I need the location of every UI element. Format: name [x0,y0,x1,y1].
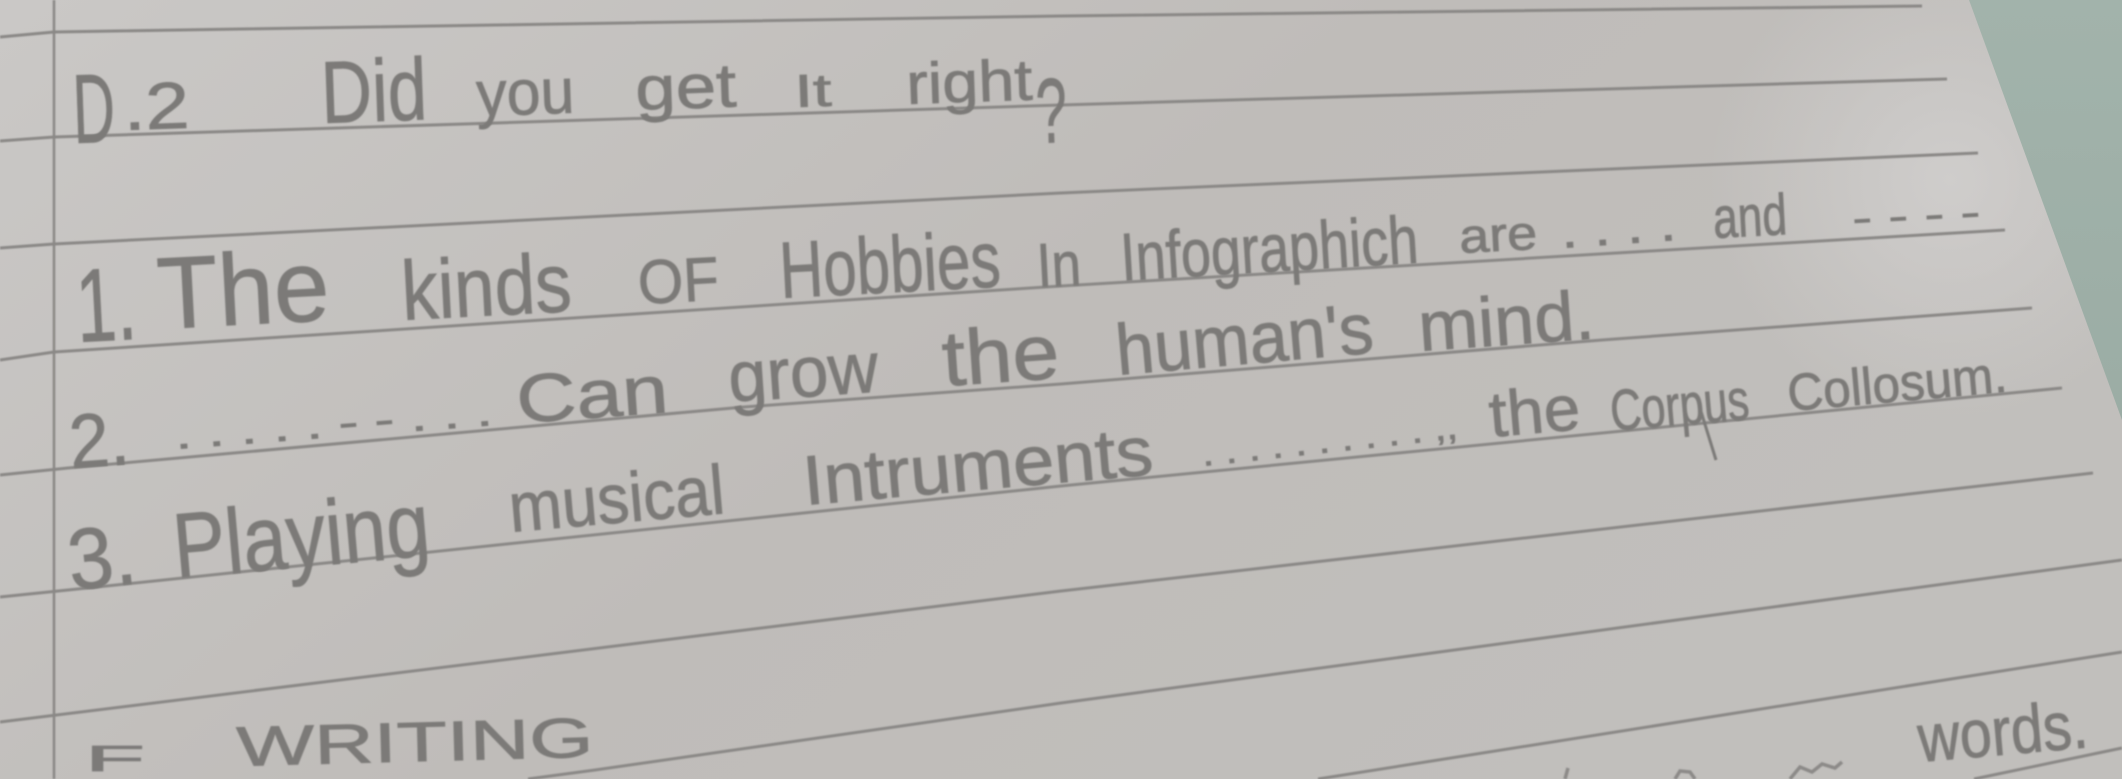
question 3: Intruments [800,412,1156,520]
heading: D.2 Did you get it right?: Did [319,39,429,142]
question 1 [73,182,1981,365]
question 1: OF [636,245,721,318]
heading: D.2 Did you get it right?: .2 [122,68,190,144]
question 3: musical [506,450,727,547]
question 1: Hobbies [777,215,1003,315]
question 1: Infographich [1118,202,1420,296]
words fragment [1565,686,2091,779]
question 1: are [1458,207,1538,264]
heading: D.2 Did you get it right?: get [634,52,737,124]
question 2: 2. [66,396,132,485]
writing label: WRITING [236,706,594,778]
heading: D.2 Did you get it right?: D [71,53,117,164]
question 2: . . . . . - - . . . [173,390,494,458]
heading: D.2 Did you get it right? [71,39,1069,164]
writing label: F [85,738,145,779]
question 3: the [1486,371,1583,451]
question 1: In [1035,230,1083,301]
question 2: the [939,307,1062,403]
question 1: . . . . [1559,198,1677,259]
question 3: Playing [169,474,434,598]
question 2: mind. [1416,276,1597,366]
question 3: Corpus [1607,367,1752,444]
question 1: - - - - [1851,190,1981,241]
question 3: . . . . . . . . . . ,, [1199,405,1459,474]
heading: D.2 Did you get it right?: right [905,48,1033,117]
writing label [85,706,594,779]
question 1: 1. [73,246,139,365]
heading: D.2 Did you get it right?: It [794,64,833,117]
question 1: kinds [399,235,574,338]
question 2: human's [1112,289,1376,391]
question 3: 3. [63,506,141,609]
question 2: grow [726,328,882,418]
question 2: Can [514,352,671,438]
question 3: Collosum. [1785,346,2009,423]
question 1: The [154,228,332,351]
question 1: and [1711,182,1789,251]
question 2 [66,276,1597,485]
heading: D.2 Did you get it right?: ? [1034,60,1069,163]
heading: D.2 Did you get it right?: you [475,55,575,130]
question 3 [63,346,2009,609]
words fragment: words. [1914,686,2091,777]
